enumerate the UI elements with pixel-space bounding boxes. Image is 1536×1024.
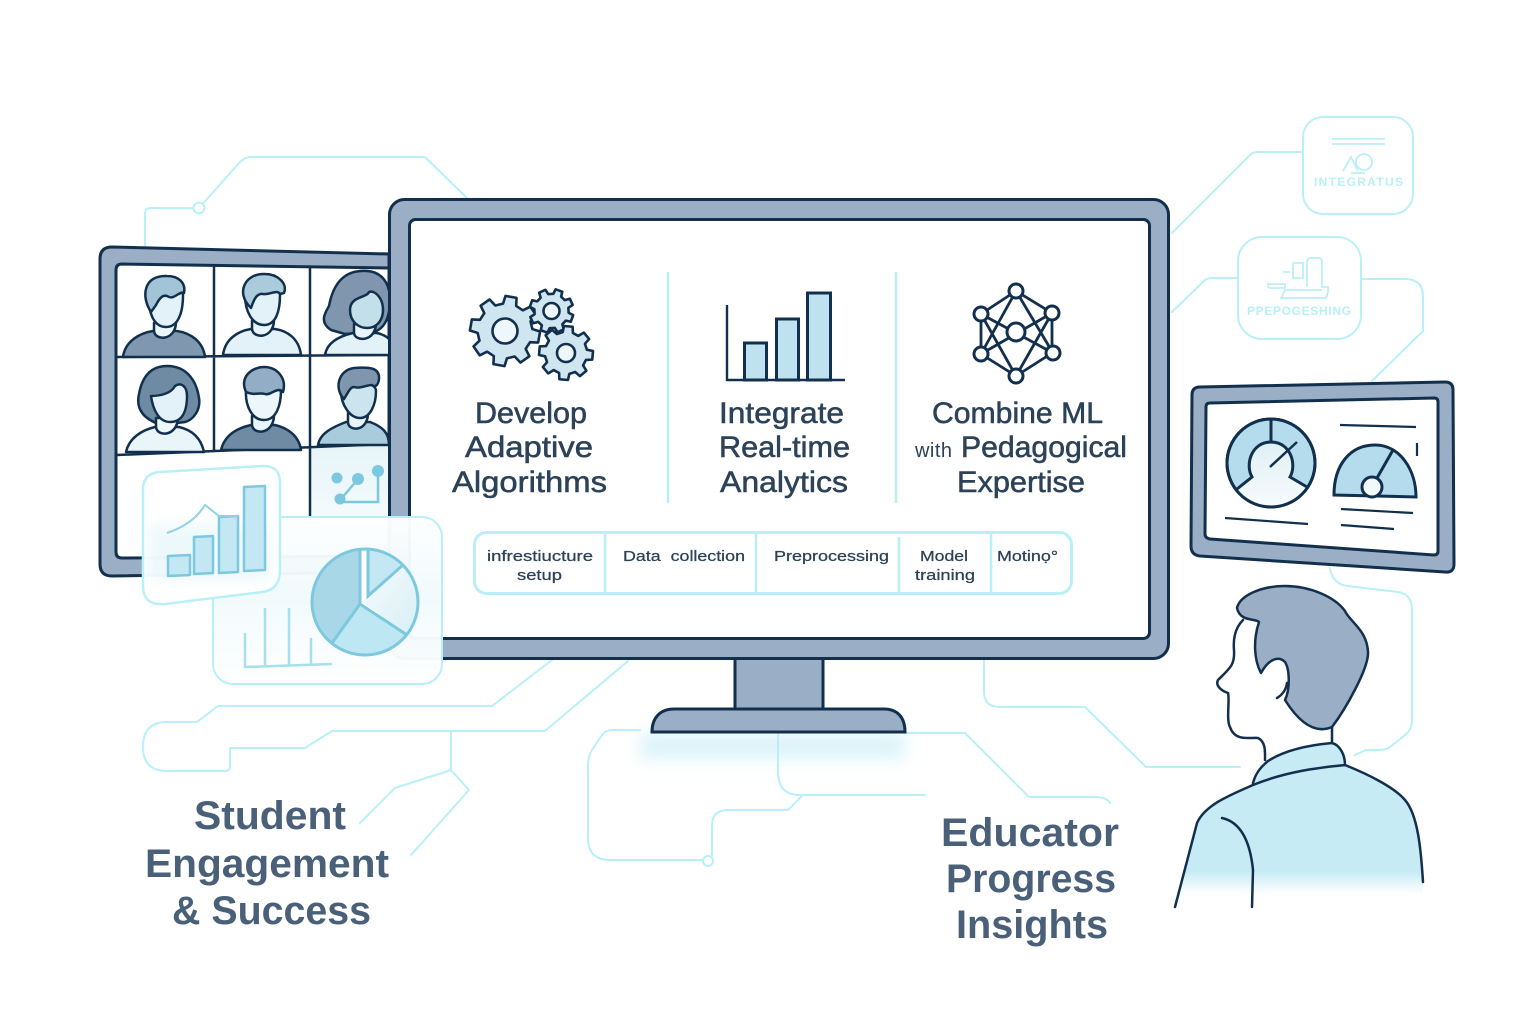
heading: Student Engagement & Success: Student [194,794,346,838]
bars [150,486,270,580]
panel: preprocessing card: PPEPOGESHING [1247,304,1351,318]
main monitor [390,200,1168,658]
panel: integratus card [1303,117,1413,214]
text: Develop Adaptive Algorithms: Develop [475,397,587,430]
text: Integrate Real-time Analytics: Analytics [720,466,848,499]
icon: gears [465,283,595,382]
panel: pie and bars card [213,517,442,684]
text: Combine ML with Pedagogical Expertise: Pedagogical [961,431,1127,464]
pie chart [312,549,418,655]
thin bar chart [245,608,332,667]
step: infrastructure setup: setup [517,567,562,584]
step: model training: Model [920,548,968,565]
panel: integratus card: INTEGRATUS [1314,175,1403,189]
heading: Student Engagement & Success [145,794,389,933]
icon: neural network [974,284,1060,383]
face profile [1217,620,1332,760]
participant 1 [123,276,205,357]
text: Develop Adaptive Algorithms: Algorithms [452,466,607,499]
right monitor: gauges [1191,382,1454,572]
text: Develop Adaptive Algorithms [452,397,607,499]
step: model training: training [915,567,975,584]
text: Combine ML with Pedagogical Expertise [914,397,1127,499]
icon: preprocessing glyph [1268,258,1328,298]
left monitor: video-call participants [100,247,400,576]
gauge: half dial [1334,445,1416,497]
participant 2 [223,274,301,355]
icon: bar chart [727,293,845,380]
text: Integrate Real-time Analytics [719,397,850,499]
step: data collection: Data collection [623,548,745,565]
step: motino: Motinọ° [997,548,1058,565]
heading: Educator Progress Insights [941,811,1119,947]
heading: Student Engagement & Success: & Success [172,889,371,933]
pipeline strip [474,532,1072,594]
trend line [167,505,238,533]
heading: Educator Progress Insights: Insights [956,903,1108,947]
text: Develop Adaptive Algorithms: Adaptive [465,431,593,464]
participant 3 [324,271,393,355]
text: Integrate Real-time Analytics: Real-time [719,431,850,464]
panel: preprocessing card [1238,237,1361,339]
heading: Student Engagement & Success: Engagement [145,842,389,886]
gauge: circular dial [1227,419,1315,507]
participant 5 [221,367,301,450]
dashboard text lines [1225,425,1417,529]
heading: Educator Progress Insights: Progress [946,857,1116,901]
shirt [1175,743,1423,907]
text: Combine ML with Pedagogical Expertise: with [914,440,952,462]
text: Combine ML with Pedagogical Expertise: Combine ML [932,397,1103,430]
heading: Educator Progress Insights: Educator [941,811,1119,855]
step: preprocessing: Preprocessing [774,548,889,565]
panel: bar and trend card [143,466,280,604]
text: Integrate Real-time Analytics: Integrate [719,397,844,430]
main monitor stand [640,655,905,759]
step: model training [915,548,975,584]
participant 6 [318,368,389,445]
step: infrastructure setup: infrestiucture [487,548,593,565]
small network glyph [332,465,384,504]
icon: integratus glyph [1332,139,1385,173]
hair [1237,586,1368,729]
text: Combine ML with Pedagogical Expertise: Expertise [957,466,1085,499]
step: infrastructure setup [487,548,593,584]
connector lines [143,152,1423,866]
participant 4 [126,366,204,452]
figure: educator viewed from behind [1175,586,1423,907]
